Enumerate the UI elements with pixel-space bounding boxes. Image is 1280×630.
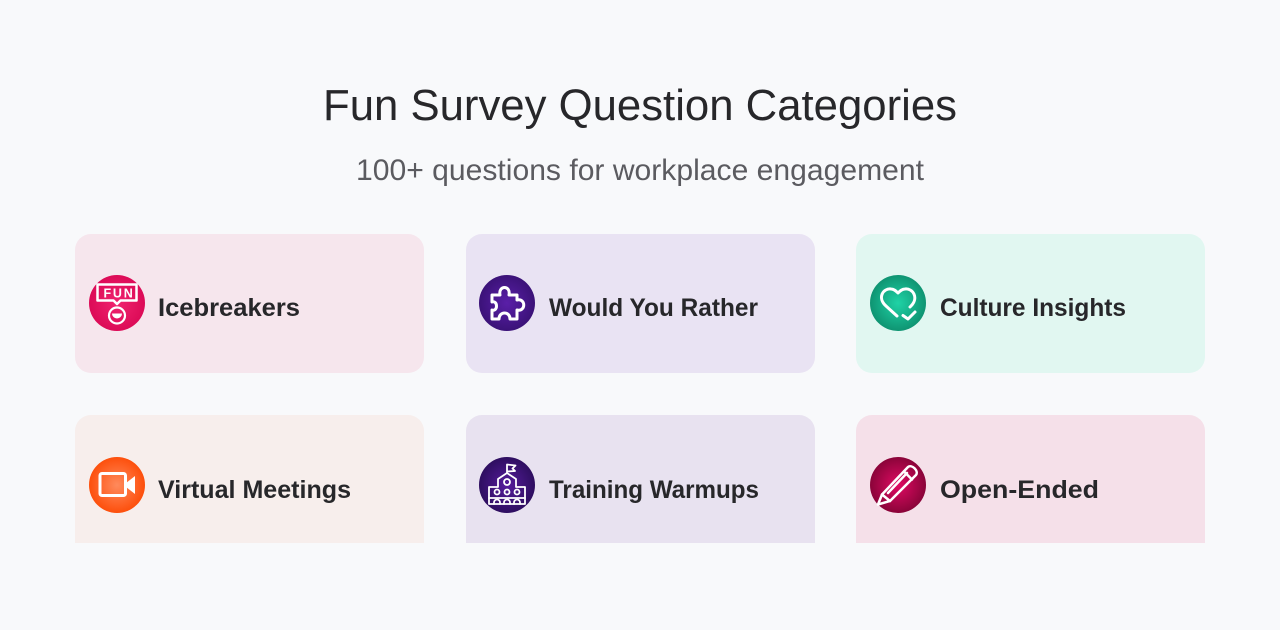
icon: school building xyxy=(479,457,535,513)
icon: fun sign: FUN xyxy=(104,286,135,300)
icon: puzzle piece xyxy=(479,275,535,331)
subtitle: 100+ questions for workplace engagement xyxy=(356,154,925,187)
label: Training Warmups xyxy=(549,476,759,504)
panel: Culture Insights xyxy=(856,234,1205,373)
label: Would You Rather xyxy=(549,294,758,322)
panel: Virtual Meetings xyxy=(75,415,424,543)
title: Fun Survey Question Categories xyxy=(323,81,957,130)
label: Icebreakers xyxy=(158,294,300,322)
panel: Would You Rather xyxy=(466,234,815,373)
label: Virtual Meetings xyxy=(158,476,351,504)
icon: heart with check xyxy=(870,275,926,331)
panel: Icebreakers xyxy=(75,234,424,373)
icon: fun sign xyxy=(89,275,145,331)
panel: Training Warmups xyxy=(466,415,815,543)
icon: pencil xyxy=(870,457,926,513)
label: Culture Insights xyxy=(940,294,1126,322)
panel: Open-Ended xyxy=(856,415,1205,543)
icon: video camera xyxy=(89,457,145,513)
label: Open-Ended xyxy=(940,476,1099,504)
